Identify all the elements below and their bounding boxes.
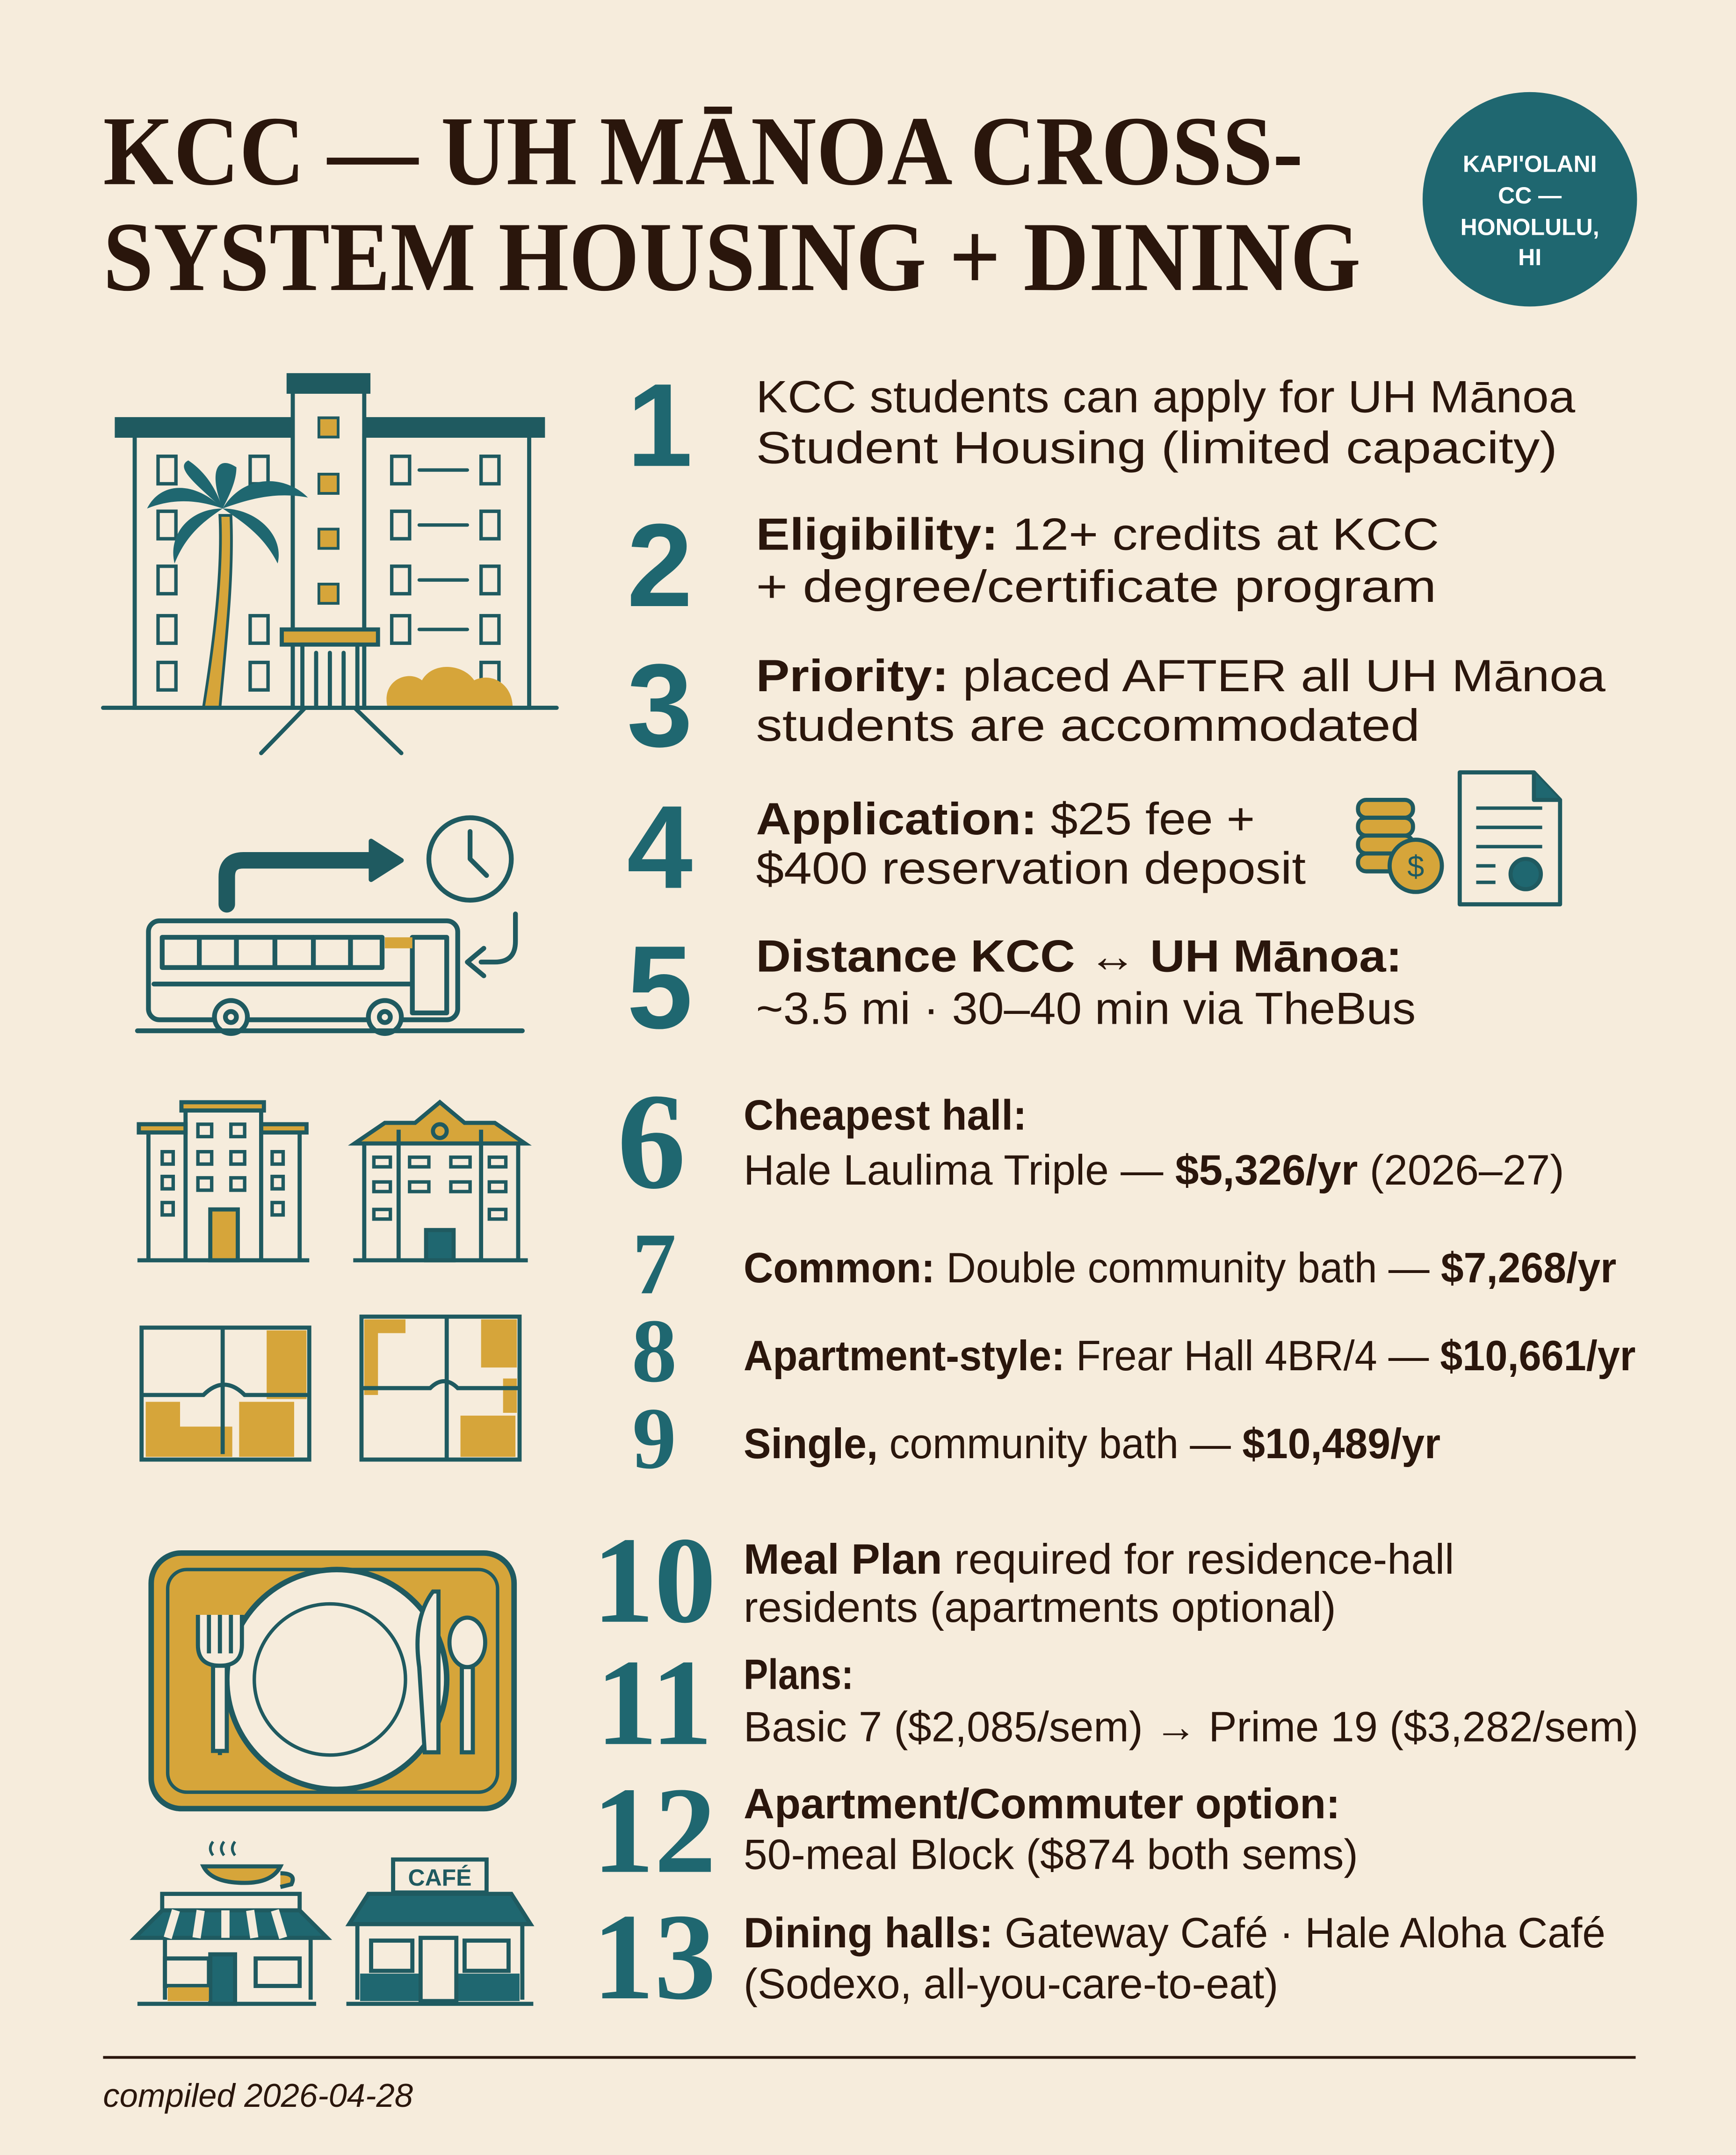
list: items 10-13 dining: (Sodexo, all-you-care-to-eat) <box>744 1960 1278 2008</box>
list: items 10-13 dining: residents (apartments optional) <box>744 1584 1336 1631</box>
list: items 10-13 dining: 50-meal Block ($874 both sems) <box>744 1831 1358 1879</box>
list: items 10-13 dining: Basic 7 ($2,085/sem) → Prime 19 ($3,282/sem) <box>744 1703 1638 1750</box>
icon: two cafés: CAFÉ <box>408 1865 471 1891</box>
list: items 1-5: 2 <box>627 499 693 631</box>
list: items 6-9 housing costs: 8 <box>631 1300 677 1401</box>
list: items 1-5: 3 <box>627 639 693 772</box>
list: items 10-13 dining: 12 <box>593 1762 716 1899</box>
list: items 10-13 dining: 10 <box>593 1512 716 1649</box>
badge: location <box>1423 92 1637 306</box>
icon: bus with arrows and clock <box>137 818 522 1034</box>
list: items 1-5: Eligibility: 12+ credits at KCC <box>756 509 1439 560</box>
list: items 10-13 dining: Apartment/Commuter option: <box>744 1780 1340 1828</box>
list: items 6-9 housing costs: Single, community bath — $10,489/yr <box>744 1420 1440 1468</box>
badge: location: HI <box>1518 244 1541 270</box>
badge: location: KAPI'OLANI <box>1463 151 1597 177</box>
list: items 1-5: 4 <box>627 781 693 913</box>
list: items 6-9 housing costs: Hale Laulima Triple — $5,326/yr (2026–27) <box>744 1147 1564 1194</box>
list: items 10-13 dining <box>593 1512 1638 2025</box>
list: items 10-13 dining: Dining halls: Gateway Café · Hale Aloha Café <box>744 1909 1606 1957</box>
list: items 1-5 <box>627 359 1606 1053</box>
list: items 10-13 dining: Meal Plan required for residence-hall <box>744 1536 1454 1583</box>
title: KCC — UH MĀNOA CROSS- <box>103 96 1303 206</box>
badge: location: HONOLULU, <box>1461 214 1599 240</box>
list: items 1-5: Student Housing (limited capacity) <box>756 422 1557 473</box>
icon: coins and document: $ <box>1407 849 1424 883</box>
list: items 6-9 housing costs: Apartment-style: Frear Hall 4BR/4 — $10,661/yr <box>744 1332 1635 1380</box>
footer: compiled date: compiled 2026-04-28 <box>103 2077 413 2114</box>
list: items 10-13 dining: 13 <box>593 1888 716 2025</box>
list: items 1-5: 5 <box>627 921 693 1053</box>
icon: residence building with palm <box>103 375 557 753</box>
list: items 1-5: students are accommodated <box>756 700 1420 751</box>
icon: two cafés <box>135 1842 533 2004</box>
title <box>103 96 1361 311</box>
list: items 1-5: + degree/certificate program <box>756 561 1436 612</box>
badge: location: CC — <box>1498 182 1562 209</box>
list: items 6-9 housing costs: 9 <box>632 1389 676 1487</box>
list: items 1-5: Application: $25 fee + <box>756 793 1255 844</box>
list: items 1-5: KCC students can apply for UH Mānoa <box>756 371 1575 422</box>
icon: floor plans <box>142 1316 520 1460</box>
list: items 1-5: $400 reservation deposit <box>756 843 1306 894</box>
icon: coins and document <box>1358 773 1560 904</box>
icon: meal tray <box>151 1553 514 1808</box>
icon: two hall buildings <box>137 1102 528 1260</box>
list: items 6-9 housing costs: Common: Double community bath — $7,268/yr <box>744 1244 1616 1292</box>
list: items 1-5: Priority: placed AFTER all UH Mānoa <box>756 650 1606 701</box>
list: items 1-5: ~3.5 mi · 30–40 min via TheBus <box>756 983 1416 1034</box>
list: items 6-9 housing costs: 6 <box>617 1065 686 1217</box>
list: items 6-9 housing costs: 7 <box>632 1215 676 1312</box>
list: items 10-13 dining: 11 <box>596 1634 713 1771</box>
list: items 10-13 dining: Plans: <box>744 1651 854 1699</box>
list: items 1-5: Distance KCC ↔ UH Mānoa: <box>756 931 1402 982</box>
title: SYSTEM HOUSING + DINING <box>103 202 1361 311</box>
list: items 6-9 housing costs: Cheapest hall: <box>744 1092 1027 1139</box>
list: items 6-9 housing costs <box>617 1065 1635 1487</box>
list: items 1-5: 1 <box>627 359 693 491</box>
